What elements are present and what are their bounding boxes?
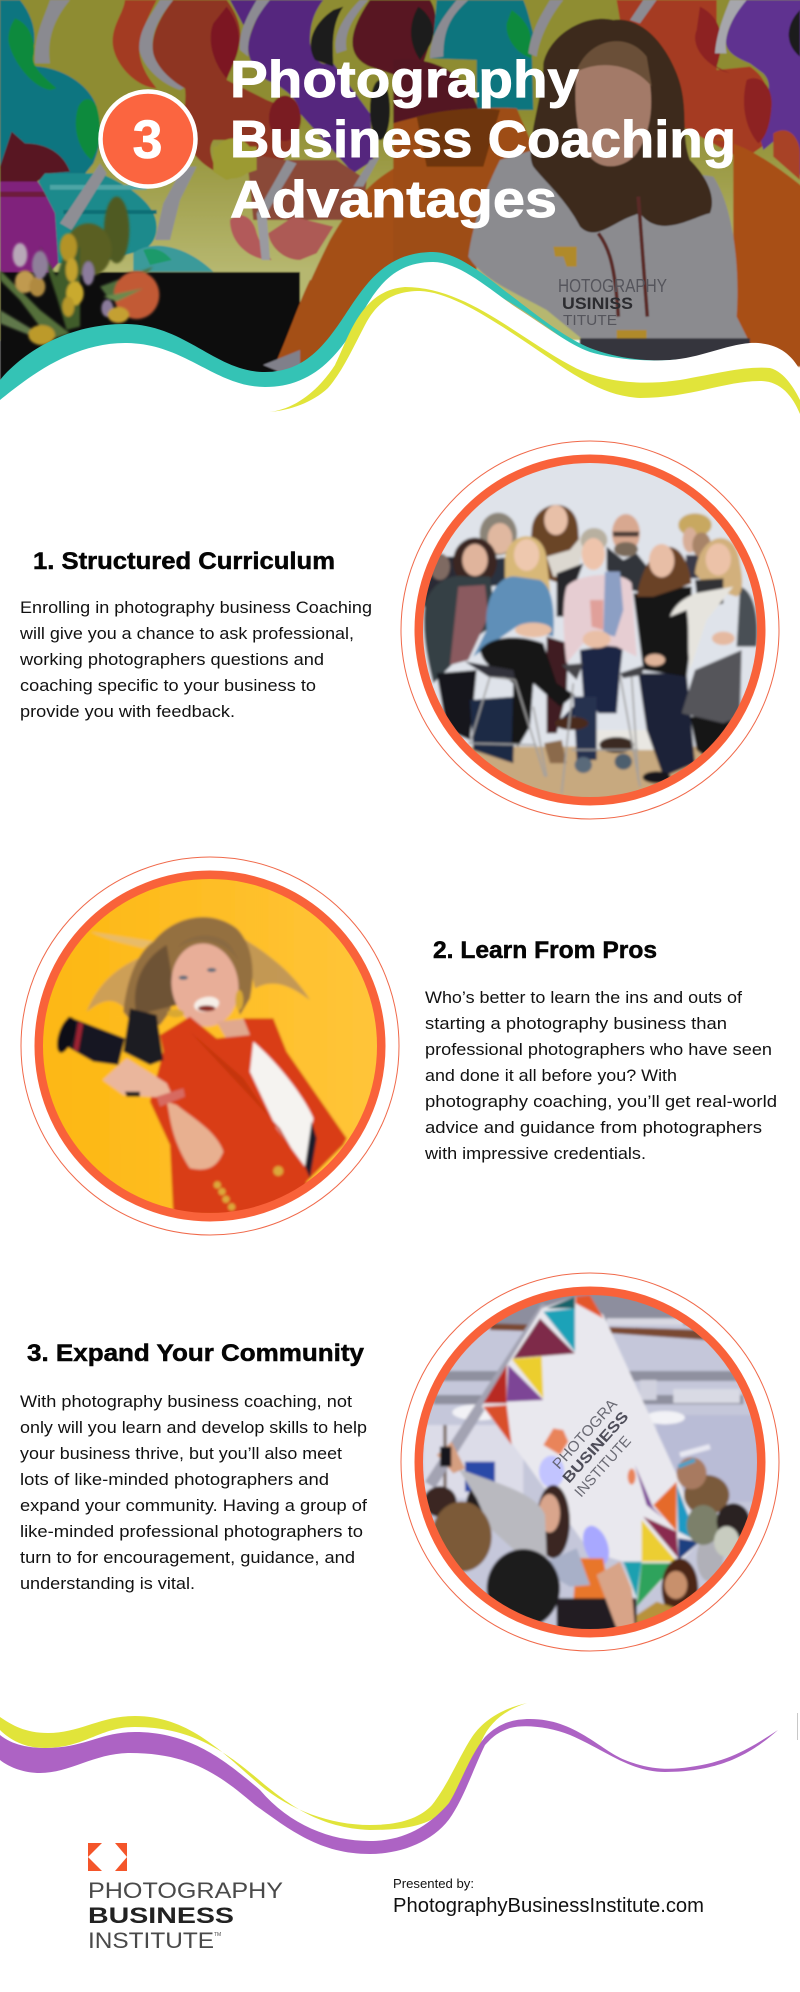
center woman (555, 528, 637, 773)
small grey edge mark (797, 1713, 798, 1740)
section 1 body text (19, 598, 372, 721)
section 2 body text: and done it all before you? With (425, 1066, 677, 1085)
title: Advantages (230, 171, 557, 229)
logo wordmark: TM (214, 1932, 221, 1938)
section 1 body text: coaching specific to your business to (20, 676, 316, 695)
teal wave (0, 252, 700, 410)
flag lettering: BUSINESS (559, 1408, 632, 1487)
hoodie lettering in header photo: HOTOGRAPHY (558, 276, 667, 296)
logo wordmark (88, 1878, 283, 1953)
section 1 body text: provide you with feedback. (20, 702, 235, 721)
website url: PhotographyBusinessInstitute.com (393, 1894, 704, 1917)
flower bouquet (0, 197, 159, 345)
left woman (424, 538, 497, 740)
section 3 body text: only will you learn and develop skills to help (20, 1418, 367, 1437)
photo circle 3: flag and crowd (401, 1273, 779, 1651)
title: Business Coaching (230, 111, 736, 169)
denim woman (473, 536, 575, 747)
section 2 body text: Who’s better to learn the ins and outs of (425, 988, 742, 1007)
section 3 body text: lots of like-minded photographers and (20, 1470, 329, 1489)
section 3 body text: turn to for encouragement, guidance, and (20, 1548, 355, 1567)
photo circle 1: group portrait (401, 441, 779, 819)
title (230, 51, 736, 229)
section 3 body text: your business thrive, but you’ll also meet (20, 1444, 342, 1463)
section 3 body text (20, 1392, 367, 1593)
section 3 body text: like-minded professional photographers to (20, 1522, 363, 1541)
logo mark (88, 1843, 127, 1871)
hoodie lettering in header photo: TITUTE (563, 312, 617, 329)
section 3 body text: understanding is vital. (20, 1574, 195, 1593)
section 2 body text: with impressive credentials. (424, 1144, 646, 1163)
logo wordmark: BUSINESS (88, 1903, 234, 1928)
section 3 body text: expand your community. Having a group of (20, 1496, 367, 1515)
flag lettering (552, 1400, 632, 1497)
scarf woman (670, 538, 757, 760)
section 1 heading: 1. Structured Curriculum (33, 548, 335, 575)
bottom yellow wave (0, 1703, 527, 1830)
hoodie lettering in header photo: USINISS (562, 294, 633, 313)
flag lettering: INSTITUTE (571, 1433, 635, 1501)
section 2 body text: starting a photography business than (425, 1014, 727, 1033)
section 2 heading: 2. Learn From Pros (433, 937, 657, 964)
number badge (100, 92, 196, 186)
section 2 body text: advice and guidance from photographers (425, 1118, 762, 1137)
section 1 body text: Enrolling in photography business Coaching (20, 598, 372, 617)
header photo background (0, 0, 800, 402)
hoodie lettering in header photo (558, 276, 667, 329)
number badge: 3 (132, 110, 163, 170)
photo circle 2: woman with camera (21, 857, 399, 1235)
yellow wave (270, 287, 800, 414)
white wave body (0, 262, 800, 430)
flag lettering: PHOTOGRA (549, 1396, 621, 1473)
bottom purple wave (0, 1719, 778, 1854)
section 2 body text: professional photographers who have seen (425, 1040, 772, 1059)
presented by label: Presented by: (393, 1876, 474, 1891)
logo wordmark: INSTITUTE (88, 1928, 214, 1953)
stools (468, 675, 640, 793)
title: Photography (230, 51, 579, 109)
section 3 heading: 3. Expand Your Community (27, 1340, 365, 1367)
section 3 body text: With photography business coaching, not (20, 1392, 352, 1411)
section 1 body text: working photographers questions and (19, 650, 324, 669)
logo wordmark: PHOTOGRAPHY (88, 1878, 283, 1903)
section 2 body text (424, 988, 777, 1163)
brown hair woman (633, 544, 695, 783)
section 2 body text: photography coaching, you’ll get real-world (425, 1092, 777, 1111)
section 1 body text: will give you a chance to ask professional, (19, 624, 354, 643)
